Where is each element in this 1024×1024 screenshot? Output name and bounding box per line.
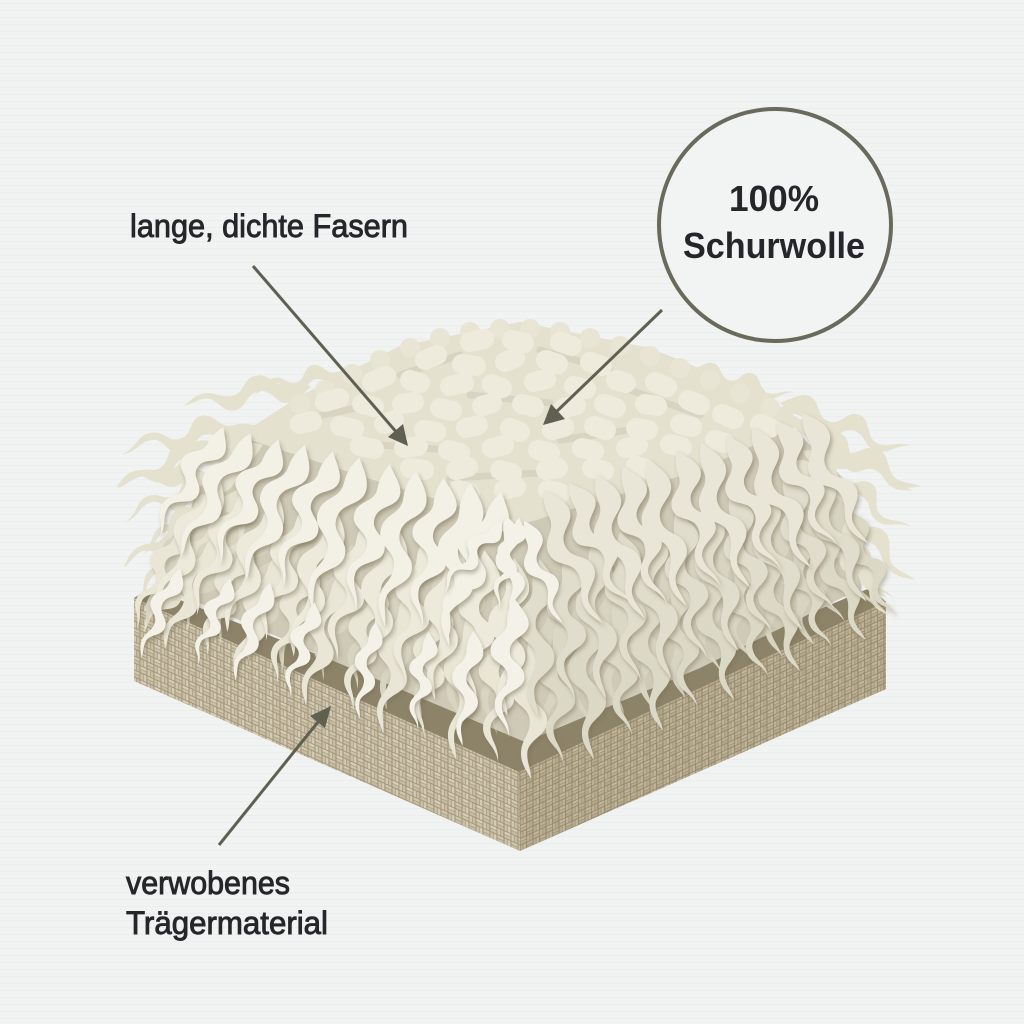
middle fibers, left side: [140, 469, 530, 717]
arrow: from badge to wool: [543, 310, 662, 425]
lower fibers, right side: [536, 505, 908, 764]
backing left face: [134, 598, 520, 851]
backing top rim: [134, 588, 886, 772]
badge: 100% Schurwolle: 100%: [729, 178, 819, 219]
middle fibers, right side: [515, 461, 883, 718]
bright foreground fibers, hanging tips: [130, 511, 575, 747]
arrow: to woven backing: [219, 706, 331, 845]
top surface curls: [238, 322, 805, 525]
woven backing material: [134, 588, 886, 851]
upper fibers, left side: [142, 417, 518, 648]
badge: 100% Schurwolle: Schurwolle: [683, 225, 865, 266]
backing right face: [519, 602, 886, 851]
label: woven backing material: verwobenes: [126, 865, 290, 901]
lower fibers, left side: [121, 516, 550, 779]
top surface curl shadows: [300, 350, 700, 478]
wool body: [165, 340, 862, 742]
top surface curl highlights: [300, 339, 770, 493]
label: woven backing material: [126, 865, 328, 941]
top surface base: [238, 322, 805, 525]
deep shadow fibers: [131, 487, 891, 743]
edge tufts: [110, 357, 929, 640]
arrow: to long dense fibers: [253, 266, 408, 446]
label: long dense fibers: lange, dichte Fasern: [130, 208, 408, 244]
top surface edge loops: [300, 329, 770, 408]
wool pile: [110, 322, 929, 779]
label: woven backing material: Trägermaterial: [126, 905, 328, 941]
upper fibers, right side: [524, 406, 884, 632]
badge: 100% Schurwolle: [659, 109, 891, 341]
